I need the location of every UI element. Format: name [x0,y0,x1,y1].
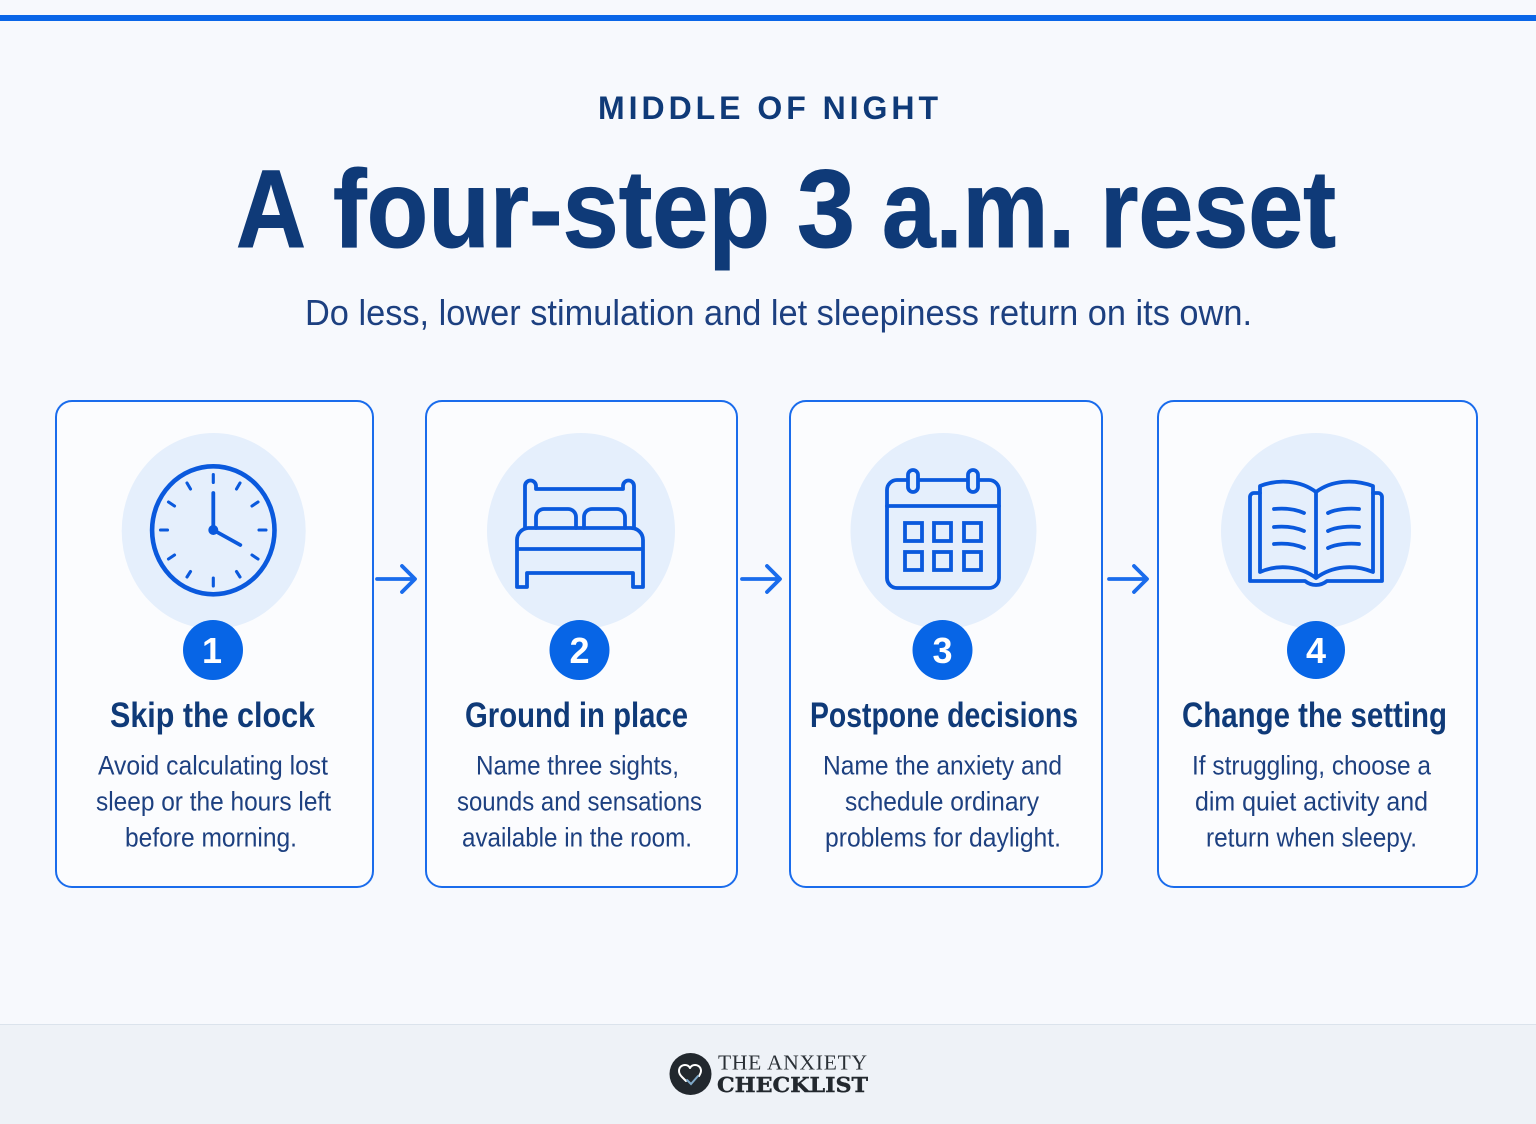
top accent bar [0,15,1536,21]
heading: Ground in place [465,696,688,735]
body text [1192,750,1432,852]
arrow 2 to 3 [742,566,780,592]
body text: sleep or the hours left [96,786,331,816]
body text: problems for daylight. [825,822,1061,852]
step number 4 [1287,621,1345,679]
step number 1: 1 [202,630,222,671]
icon: bed [487,433,675,629]
heading: Change the setting [1182,696,1447,735]
icon: clock [122,433,306,629]
body text [823,750,1062,852]
panel: step 1 skip the clock [56,401,373,887]
body text: dim quiet activity and [1195,786,1428,816]
eyebrow: MIDDLE OF NIGHT [598,90,938,126]
body text: Name the anxiety and [823,750,1062,780]
subtitle: Do less, lower stimulation and let sleepiness return on its own. [305,292,1252,333]
body text: sounds and sensations [457,786,702,816]
icon: open book [1221,433,1411,629]
body text: If struggling, choose a [1192,750,1432,780]
step number 4: 4 [1306,630,1326,671]
step number 3 [912,620,972,680]
logo mark: heart with check [670,1053,712,1095]
body text: before morning. [125,822,297,852]
arrow 3 to 4 [1109,566,1147,592]
body text: Avoid calculating lost [98,750,328,780]
step number 3: 3 [932,630,953,671]
body text: return when sleepy. [1206,822,1417,852]
body text: Name three sights, [476,750,679,780]
heading: Skip the clock [110,696,315,735]
step number 2: 2 [569,630,590,671]
step number 2 [550,620,610,680]
body text [457,750,702,852]
logo wordmark [717,1050,869,1097]
logo wordmark: THE ANXIETY [718,1050,867,1074]
title: A [236,148,306,271]
panel: step 2 ground in place [426,401,737,887]
footer band [0,1024,1536,1124]
body text: schedule ordinary [845,786,1039,816]
title: reset [1100,148,1336,271]
arrow 1 to 2 [377,566,415,592]
footer logo [670,1050,869,1097]
title [236,148,1336,271]
body text [96,750,331,852]
panel: step 3 postpone decisions [790,401,1102,887]
title: four-step [333,148,770,271]
step number 1 [183,620,243,680]
heading: Postpone decisions [810,696,1078,735]
panel: step 4 change the setting [1158,401,1477,887]
icon: calendar [850,433,1036,629]
title: 3 [797,148,855,271]
body text: available in the room. [462,822,692,852]
title: a.m. [882,148,1075,271]
logo wordmark: CHECKLIST [717,1073,869,1097]
